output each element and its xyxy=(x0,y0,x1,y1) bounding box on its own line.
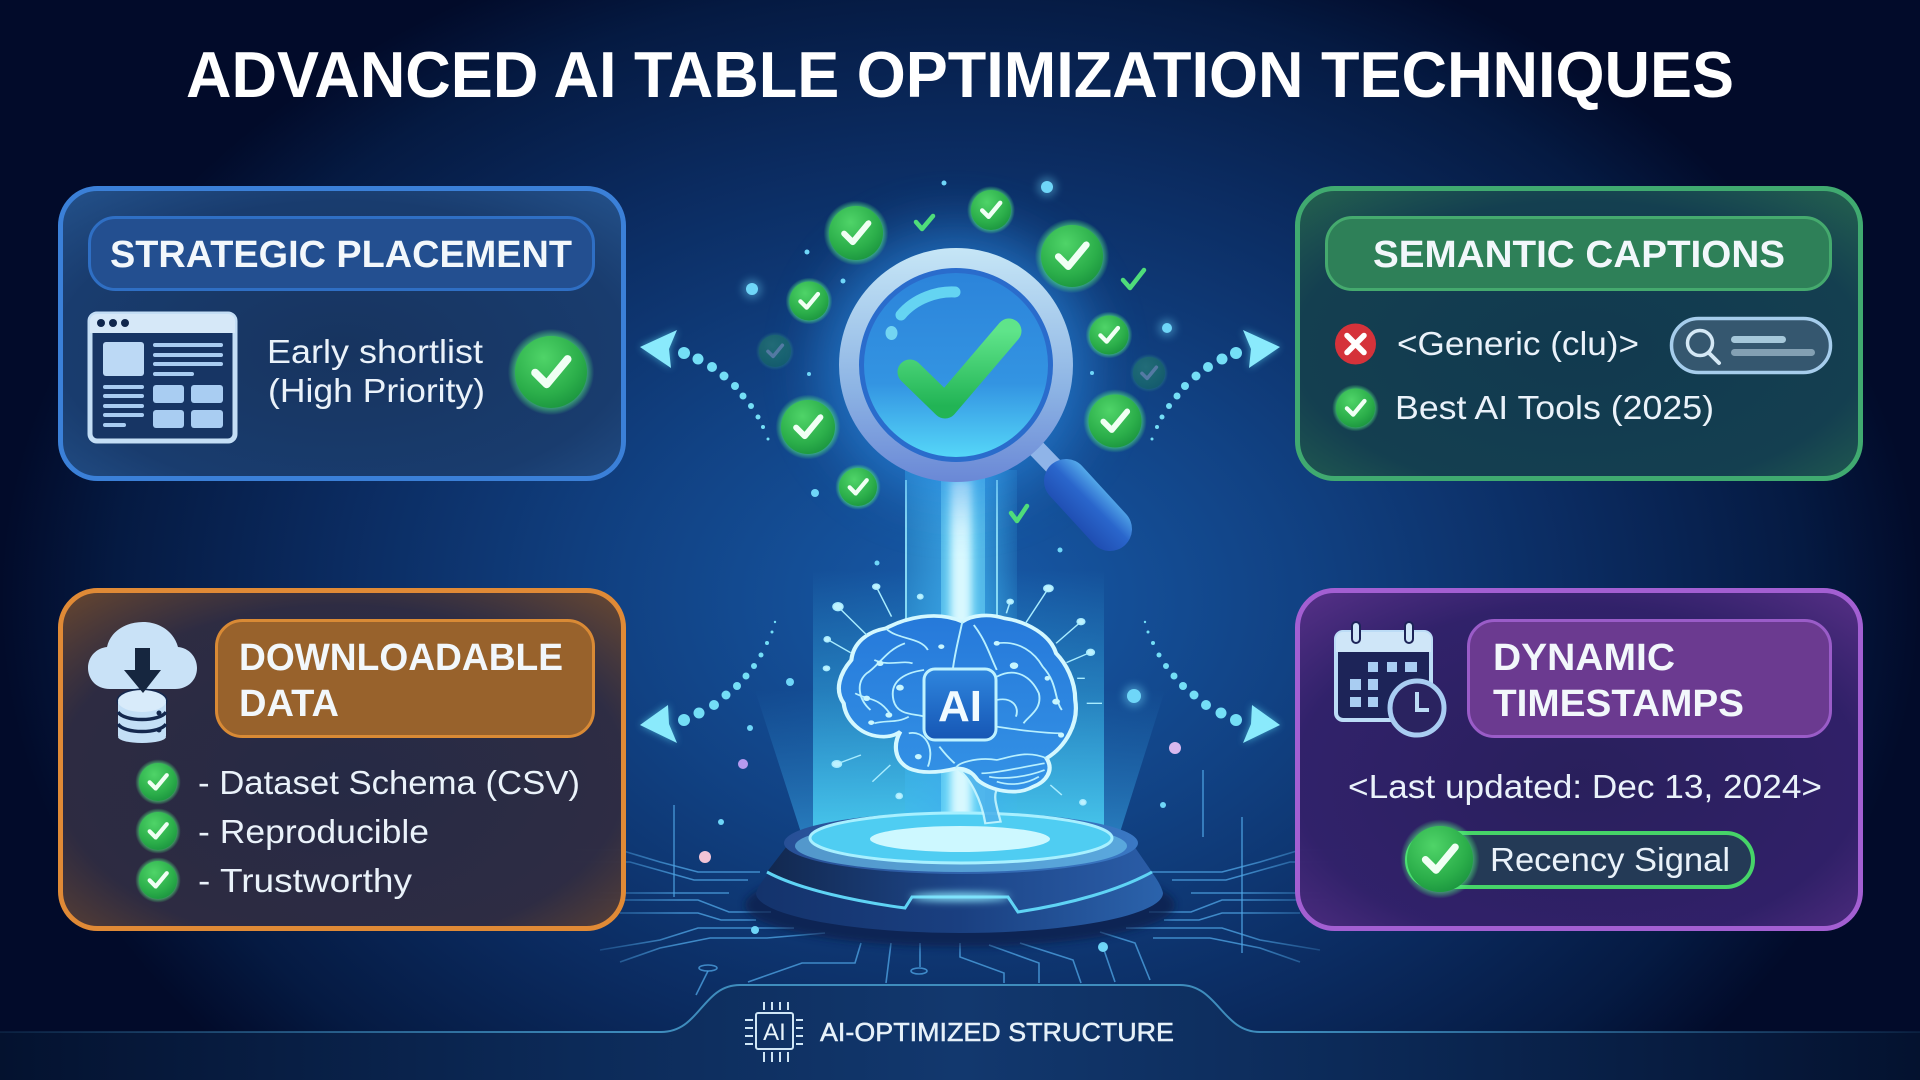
platform glow xyxy=(810,813,1112,863)
heading text: DATA xyxy=(239,683,339,725)
neural rays xyxy=(823,584,1102,805)
title: ADVANCED AI TABLE OPTIMIZATION TECHNIQUES xyxy=(186,38,1734,111)
checklist: - Trustworthy xyxy=(198,862,413,899)
icon: AI chip: AI xyxy=(763,1019,786,1046)
heading text: DOWNLOADABLE xyxy=(239,637,563,679)
icon: search bar xyxy=(1672,318,1830,372)
pedestal xyxy=(745,812,1175,947)
panel: semantic captions xyxy=(1298,188,1860,478)
icon: calendar with clock xyxy=(1336,622,1444,735)
recency signal pill xyxy=(1400,819,1753,899)
footer label: AI-OPTIMIZED STRUCTURE xyxy=(820,1017,1174,1047)
large check mark xyxy=(910,331,1009,406)
icon: check xyxy=(1332,385,1379,431)
bad caption text: <Generic (clu)> xyxy=(1397,325,1639,362)
icon: red cross xyxy=(1335,324,1376,364)
magnifier handle xyxy=(1035,447,1110,529)
arrow: bottom left xyxy=(640,621,776,743)
heading text xyxy=(1493,637,1744,725)
checklist: - Dataset Schema (CSV) xyxy=(198,764,580,801)
heading pill xyxy=(1326,218,1830,290)
panel: strategic placement xyxy=(60,188,624,478)
hologram cylinder xyxy=(813,570,1104,845)
brain folds xyxy=(855,622,1062,784)
icon: AI chip xyxy=(745,1002,803,1062)
heading text: DYNAMIC xyxy=(1493,637,1675,679)
heading pill xyxy=(90,218,594,290)
body text: (High Priority) xyxy=(268,372,485,409)
AI chip on brain xyxy=(924,669,996,740)
heading text: TIMESTAMPS xyxy=(1493,683,1744,725)
floating light particles xyxy=(699,177,1181,952)
circuit board traces xyxy=(560,770,1360,995)
lens highlight xyxy=(901,292,955,315)
panel: dynamic timestamps xyxy=(1298,590,1860,928)
AI chip on brain: AI xyxy=(938,682,982,731)
neural nodes xyxy=(863,641,1064,759)
checklist xyxy=(135,759,580,903)
bottom band: AI-optimized structure xyxy=(0,985,1920,1080)
icon: check xyxy=(508,329,594,415)
central light beam xyxy=(905,470,1017,850)
green check badges xyxy=(756,186,1168,521)
recency signal pill: Recency Signal xyxy=(1490,841,1730,878)
body text: Early shortlist xyxy=(267,333,483,370)
cylinder light cone xyxy=(755,690,1165,845)
heading text xyxy=(239,637,563,725)
arrow: bottom right xyxy=(1144,621,1280,743)
magnifying glass xyxy=(821,230,1110,529)
heading text: STRATEGIC PLACEMENT xyxy=(110,234,572,276)
icon: web page layout xyxy=(90,314,235,441)
checklist: - Reproducible xyxy=(198,813,429,850)
body text xyxy=(267,333,485,409)
arrow: top right xyxy=(1150,330,1280,440)
arrow: top left xyxy=(640,330,770,440)
brain hologram xyxy=(823,584,1102,823)
heading pill xyxy=(216,620,594,736)
brain stem xyxy=(957,768,1001,823)
good caption text: Best AI Tools (2025) xyxy=(1395,389,1714,426)
panel: downloadable data xyxy=(60,590,624,928)
heading text: SEMANTIC CAPTIONS xyxy=(1373,234,1785,276)
timestamp text: <Last updated: Dec 13, 2024> xyxy=(1348,768,1822,805)
brain outline xyxy=(839,615,1076,792)
heading pill xyxy=(1468,620,1830,736)
icon: cloud download database xyxy=(88,622,197,743)
